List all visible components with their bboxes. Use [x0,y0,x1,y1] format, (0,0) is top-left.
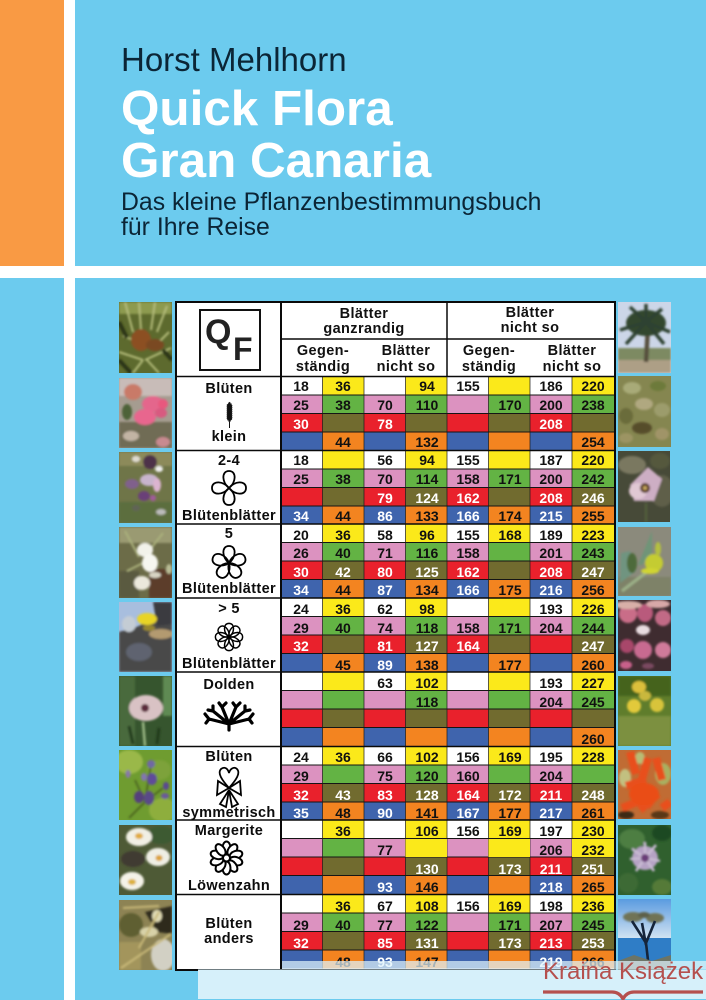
numbers: 2-4 petals: 70 [377,471,393,487]
numbers: 5 petals: 42 [335,564,351,580]
numbers: more than 5 petals: 260 [581,657,605,673]
numbers: more than 5 petals: 98 [419,601,435,617]
numbers: 2-4 petals: 56 [377,452,393,468]
numbers: umbels: 102 [415,675,439,691]
numbers: 5 petals: 87 [377,582,393,598]
header: leaves columns [296,305,601,375]
numbers: small flowers: 200 [539,397,563,413]
numbers: other flowers: 108 [415,898,439,914]
numbers: 2-4 petals: 171 [498,471,522,487]
numbers: small flowers: 110 [416,397,439,413]
numbers: small flowers: 44 [335,434,351,450]
numbers: 5 petals: 40 [335,545,351,561]
numbers: daisies and dandelions: 173 [498,861,522,877]
numbers: symmetrical flowers: 24 [293,749,309,765]
numbers: 2-4 petals: 25 [293,471,309,487]
numbers: symmetrical flowers: 156 [456,749,480,765]
numbers: other flowers: 32 [293,935,309,951]
table frame [176,302,615,970]
panel: blue title area [75,0,706,266]
numbers: other flowers: 173 [498,935,522,951]
numbers: more than 5 petals: 177 [498,657,522,673]
numbers: 2-4 petals: 200 [539,471,563,487]
logo: QF box [200,310,260,370]
numbers: more than 5 petals: 127 [415,638,439,654]
numbers: symmetrical flowers: 177 [498,805,522,821]
numbers: 2-4 petals [293,452,605,524]
numbers: 5 petals: 158 [456,545,480,561]
numbers: symmetrical flowers: 29 [293,768,309,784]
row label: other flowers [204,916,254,947]
header: leaves columns: ständig [462,359,516,375]
numbers: symmetrical flowers: 48 [335,805,351,821]
numbers: small flowers: 208 [539,416,563,432]
numbers: other flowers: 48 [335,954,351,970]
logo: QF box: Q [205,313,231,351]
numbers: symmetrical flowers: 169 [498,749,522,765]
numbers: 2-4 petals: 166 [456,508,480,524]
numbers: small flowers: 36 [335,378,351,394]
numbers: 2-4 petals: 124 [415,490,439,506]
numbers: more than 5 petals: 74 [377,620,393,636]
numbers: symmetrical flowers: 228 [581,749,605,765]
numbers: 5 petals: 247 [581,564,605,580]
numbers: 5 petals: 116 [416,545,439,561]
numbers: 5 petals: 243 [581,545,605,561]
row label: 5 petals: Blütenblätter [182,581,276,597]
photo: purple flowers [119,452,172,523]
numbers: 5 petals: 166 [456,582,480,598]
numbers: 2-4 petals: 255 [581,508,605,524]
row label: daisies and dandelions: Löwenzahn [188,878,270,894]
numbers: other flowers: 29 [293,917,309,933]
photo: shrub leaves [618,376,671,447]
photo: pink flowers [119,378,172,448]
photo column: right [614,302,674,971]
title [121,81,432,188]
table grid backgrounds [176,302,615,970]
numbers: 5 petals: 256 [581,582,605,598]
author name: Horst Mehlhorn [121,41,347,78]
numbers: other flowers: 40 [335,917,351,933]
numbers: symmetrical flowers: 172 [498,787,522,803]
numbers: symmetrical flowers [293,749,605,821]
numbers: more than 5 petals: 32 [293,638,309,654]
header: leaves columns: nicht so [501,320,559,336]
header: leaves columns: nicht so [377,359,435,375]
numbers: symmetrical flowers: 66 [377,749,393,765]
numbers: symmetrical flowers: 217 [539,805,563,821]
row label: symmetrical flowers: symmetrisch [182,805,276,821]
numbers: 2-4 petals: 242 [581,471,605,487]
numbers: 2-4 petals: 246 [581,490,605,506]
photo: pine cone [119,302,172,373]
numbers: daisies and dandelions: 130 [415,861,439,877]
numbers: symmetrical flowers: 141 [415,805,439,821]
numbers: daisies and dandelions: 156 [456,823,480,839]
numbers: symmetrical flowers: 164 [456,787,480,803]
numbers: daisies and dandelions: 93 [377,879,393,895]
panel: orange corner block [0,0,64,266]
numbers: 2-4 petals: 133 [415,508,439,524]
numbers: symmetrical flowers: 261 [581,805,605,821]
numbers: 2-4 petals: 114 [416,471,439,487]
numbers: daisies and dandelions: 218 [539,879,563,895]
numbers: more than 5 petals: 193 [539,601,563,617]
header: leaves columns: Gegen- [463,343,515,359]
numbers: 5 petals: 134 [415,582,439,598]
header: leaves columns: Gegen- [297,343,349,359]
numbers: daisies and dandelions: 251 [581,861,605,877]
numbers: 5 petals: 20 [293,527,309,543]
photo: palm tree [618,302,671,373]
numbers: more than 5 petals: 158 [456,620,480,636]
numbers: 2-4 petals: 86 [377,508,393,524]
numbers: 2-4 petals: 174 [498,508,522,524]
photo: umbel flower [119,676,172,746]
numbers: symmetrical flowers: 83 [377,787,393,803]
numbers: 2-4 petals: 162 [456,490,480,506]
panel: blue main area [75,278,706,1000]
numbers: 5 petals: 216 [539,582,563,598]
numbers: 5 petals: 36 [335,527,351,543]
row label: other flowers: Blüten [205,916,253,932]
photo: verbena [119,750,172,820]
numbers: small flowers: 94 [419,378,435,394]
numbers: 2-4 petals: 94 [419,452,435,468]
numbers: other flowers [293,898,605,970]
photo: dried twigs [119,900,172,970]
numbers: small flowers: 170 [498,397,522,413]
numbers: more than 5 petals: 247 [581,638,605,654]
numbers: daisies and dandelions: 197 [539,823,563,839]
numbers: 2-4 petals: 187 [539,452,563,468]
header: leaves columns: Blätter [548,343,596,359]
row label: 5 petals [182,526,276,597]
photo column: left [115,302,177,971]
numbers: other flowers: 131 [415,935,439,951]
numbers: 2-4 petals: 38 [335,471,351,487]
photo: yellow flower leaf [618,527,671,596]
title: Quick Flora [121,81,393,136]
numbers: more than 5 petals: 62 [377,601,393,617]
numbers: daisies and dandelions: 265 [581,879,605,895]
numbers: symmetrical flowers: 43 [335,787,351,803]
numbers: 2-4 petals: 155 [456,452,480,468]
row label: 5 petals: 5 [225,526,233,542]
numbers: small flowers: 30 [293,416,309,432]
numbers: 5 petals: 175 [498,582,522,598]
numbers: more than 5 petals: 29 [293,620,309,636]
numbers: daisies and dandelions: 36 [335,823,351,839]
numbers: other flowers: 169 [498,898,522,914]
row label: more than 5 petals [182,601,276,672]
numbers: small flowers: 186 [539,378,563,394]
photo: dragon tree and sea [618,899,671,970]
row label: more than 5 petals: > 5 [218,601,240,617]
numbers: more than 5 petals: 138 [415,657,439,673]
watermark band [198,961,706,999]
numbers: daisies and dandelions: 146 [415,879,439,895]
numbers: 2-4 petals: 215 [539,508,563,524]
numbers: small flowers: 132 [415,434,439,450]
numbers: 5 petals: 44 [335,582,351,598]
numbers: other flowers: 171 [498,917,522,933]
numbers: small flowers [293,378,605,450]
row label: symmetrical flowers [182,749,276,821]
numbers: 2-4 petals: 18 [293,452,309,468]
photo: pink flower cluster [618,600,671,671]
numbers: 5 petals: 96 [419,527,435,543]
numbers: 5 petals: 162 [456,564,480,580]
numbers: symmetrical flowers: 102 [415,749,439,765]
numbers: more than 5 petals: 226 [581,601,605,617]
row label: more than 5 petals: Blütenblätter [182,656,276,672]
row label: daisies and dandelions [188,823,270,894]
numbers: umbels: 118 [416,694,439,710]
numbers: more than 5 petals [293,601,605,673]
numbers: symmetrical flowers: 35 [293,805,309,821]
logo: QF box: F [233,331,253,367]
title: Gran Canaria [121,133,432,188]
numbers: small flowers: 70 [377,397,393,413]
photo: poppy [618,451,670,522]
numbers: small flowers: 78 [377,416,393,432]
watermark: Kraina Książek [543,958,704,999]
numbers: 2-4 petals: 44 [335,508,351,524]
numbers: other flowers: 253 [581,935,605,951]
numbers: other flowers: 67 [377,898,393,914]
numbers: symmetrical flowers: 120 [415,768,439,784]
photo: yellow umbels [618,676,671,746]
numbers: 5 petals: 30 [293,564,309,580]
numbers: daisies and dandelions: 169 [498,823,522,839]
numbers: small flowers: 254 [581,434,605,450]
numbers: daisies and dandelions: 77 [377,842,393,858]
numbers: umbels: 193 [539,675,563,691]
numbers: other flowers: 36 [335,898,351,914]
numbers: daisies and dandelions: 106 [415,823,439,839]
numbers: other flowers: 207 [539,917,563,933]
numbers: symmetrical flowers: 211 [540,787,563,803]
watermark: Kraina Książek: Kraina Książek [543,958,704,985]
numbers: small flowers: 25 [293,397,309,413]
numbers: 5 petals: 26 [293,545,309,561]
numbers: daisies and dandelions: 230 [581,823,605,839]
photo: daisies [119,825,172,895]
numbers: umbels: 245 [581,694,605,710]
numbers: 5 petals: 80 [377,564,393,580]
numbers: other flowers: 219 [539,954,563,970]
numbers: more than 5 petals: 89 [377,657,393,673]
numbers: 2-4 petals: 79 [377,490,393,506]
numbers: 5 petals: 189 [539,527,563,543]
row label: 2-4 petals [182,453,276,524]
numbers: other flowers: 122 [415,917,439,933]
numbers: 5 petals: 125 [415,564,439,580]
numbers: other flowers: 266 [581,954,605,970]
numbers: daisies and dandelions: 206 [539,842,563,858]
header: leaves columns: ständig [296,359,350,375]
numbers: 2-4 petals: 220 [581,452,605,468]
panel: blue left strip [0,278,64,1000]
numbers: umbels [377,675,605,747]
row label: 2-4 petals: Blütenblätter [182,508,276,524]
numbers: more than 5 petals: 40 [335,620,351,636]
numbers: daisies and dandelions: 232 [581,842,605,858]
photo: white flowers [119,527,172,598]
numbers: small flowers: 155 [456,378,480,394]
row label: small flowers: klein [212,429,246,445]
numbers: other flowers: 85 [377,935,393,951]
numbers: more than 5 petals: 36 [335,601,351,617]
row label: umbels [203,677,255,730]
row label: small flowers [205,381,253,445]
numbers: symmetrical flowers: 248 [581,787,605,803]
numbers: 2-4 petals: 158 [456,471,480,487]
numbers: 5 petals: 58 [377,527,393,543]
row label: symmetrical flowers: Blüten [205,749,253,765]
row label: 2-4 petals: 2-4 [218,453,240,469]
numbers: other flowers: 93 [377,954,393,970]
numbers: other flowers: 236 [581,898,605,914]
numbers: 5 petals: 223 [581,527,605,543]
numbers: more than 5 petals: 118 [416,620,439,636]
numbers: 5 petals: 208 [539,564,563,580]
numbers: daisies and dandelions: 211 [540,861,563,877]
numbers: other flowers: 156 [456,898,480,914]
numbers: daisies and dandelions [335,823,605,895]
numbers: small flowers: 220 [581,378,605,394]
numbers: umbels: 260 [581,731,605,747]
numbers: more than 5 petals: 204 [539,620,563,636]
photo: lilac star flower [618,825,671,895]
numbers: umbels: 63 [377,675,393,691]
numbers: symmetrical flowers: 160 [456,768,480,784]
numbers: 2-4 petals: 208 [539,490,563,506]
numbers: symmetrical flowers: 204 [539,768,563,784]
subtitle: für Ihre Reise [121,214,270,241]
row label: small flowers: Blüten [205,381,253,397]
numbers: symmetrical flowers: 90 [377,805,393,821]
numbers: other flowers: 213 [539,935,563,951]
numbers: 5 petals: 71 [377,545,393,561]
numbers: other flowers: 77 [377,917,393,933]
row label: umbels: Dolden [203,677,255,693]
header: leaves columns: ganzrandig [323,321,405,337]
numbers: more than 5 petals: 81 [377,638,393,654]
numbers: small flowers: 18 [293,378,309,394]
numbers: umbels: 204 [539,694,563,710]
numbers: more than 5 petals: 45 [335,657,351,673]
numbers: 2-4 petals: 34 [293,508,309,524]
numbers: small flowers: 238 [581,397,605,413]
numbers: small flowers: 38 [335,397,351,413]
numbers: more than 5 petals: 164 [456,638,480,654]
header: leaves columns: Blätter [506,305,554,321]
numbers: symmetrical flowers: 36 [335,749,351,765]
numbers: symmetrical flowers: 32 [293,787,309,803]
numbers: 5 petals: 34 [293,582,309,598]
numbers: symmetrical flowers: 167 [456,805,480,821]
numbers: more than 5 petals: 171 [498,620,522,636]
header: leaves columns: Blätter [340,306,388,322]
subtitle [121,189,541,241]
numbers: more than 5 petals: 24 [293,601,309,617]
numbers: other flowers: 245 [581,917,605,933]
numbers: 5 petals: 155 [456,527,480,543]
numbers: symmetrical flowers: 75 [377,768,393,784]
photo: orange-red flowers [618,750,671,819]
row label: daisies and dandelions: Margerite [195,823,263,839]
numbers: umbels: 227 [581,675,605,691]
header: leaves columns: nicht so [543,359,601,375]
photo: yellow flowers on rock [119,602,172,672]
numbers: other flowers: 198 [539,898,563,914]
header: leaves columns: Blätter [382,343,430,359]
numbers: symmetrical flowers: 195 [539,749,563,765]
numbers: 5 petals: 201 [539,545,563,561]
numbers: 5 petals [293,527,605,598]
numbers: other flowers: 147 [415,954,439,970]
table [176,302,615,970]
numbers: 5 petals: 168 [498,527,522,543]
numbers: symmetrical flowers: 128 [415,787,439,803]
numbers: more than 5 petals: 244 [581,620,605,636]
subtitle: Das kleine Pflanzenbestimmungsbuch [121,189,541,216]
row label: other flowers: anders [204,931,254,947]
